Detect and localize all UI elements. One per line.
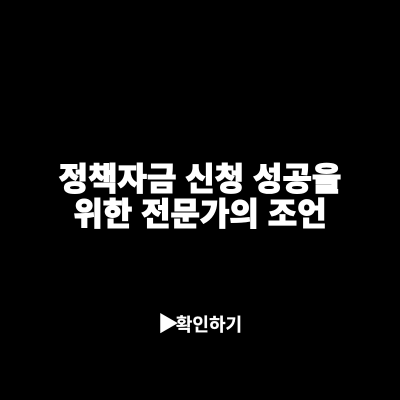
link: confirm call to action: ▶확인하기 (158, 313, 242, 336)
title: 정책자금 신청 성공을 (59, 161, 341, 197)
title: 위한 전문가의 조언 (73, 196, 327, 232)
title (58, 161, 341, 232)
